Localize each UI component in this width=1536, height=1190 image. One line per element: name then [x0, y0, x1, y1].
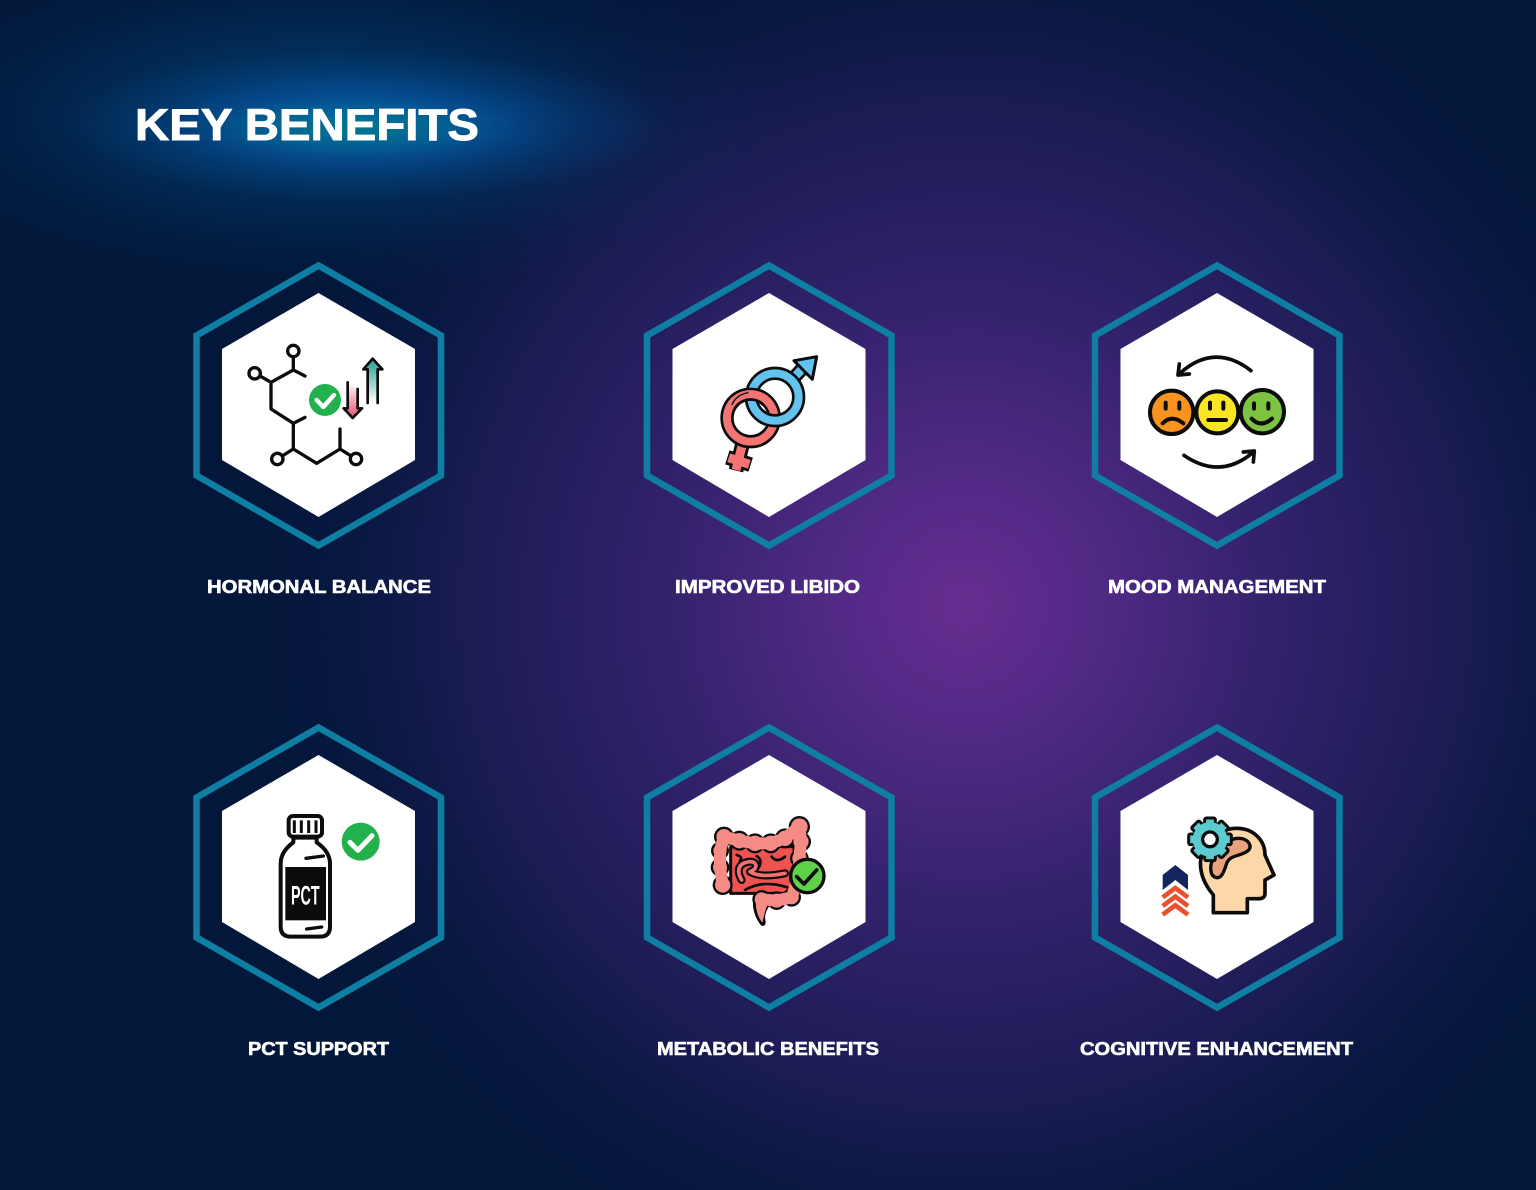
panel: pct support: [196, 728, 441, 1059]
label: PCT SUPPORT: [248, 1039, 389, 1059]
title: KEY BENEFITS: [135, 101, 479, 150]
hexagon frame: mood management: [1095, 266, 1340, 546]
label: COGNITIVE ENHANCEMENT: [1080, 1039, 1353, 1059]
icon: molecule with hormone arrows: [249, 345, 382, 465]
icon: intertwined male and female symbols: [727, 357, 817, 471]
label: METABOLIC BENEFITS: [657, 1039, 879, 1059]
label: IMPROVED LIBIDO: [675, 577, 860, 597]
icon: pct bottle with check: PCT: [291, 880, 320, 910]
panel: metabolic benefits: [647, 728, 892, 1059]
panel: improved libido: [647, 266, 892, 597]
hexagon frame: pct support: [196, 728, 441, 1008]
panel: hormonal balance: [196, 266, 441, 597]
icon: head with gear and rising chevrons: [1163, 818, 1274, 915]
icon: mood faces with cycle arrows: [1150, 357, 1284, 467]
hexagon frame: cognitive enhancement: [1095, 728, 1340, 1008]
label: HORMONAL BALANCE: [207, 577, 431, 597]
icon: intestines with check: [711, 816, 824, 926]
icon: pct bottle with check: [281, 816, 380, 937]
panel: mood management: [1095, 266, 1340, 597]
hexagon frame: hormonal balance: [196, 266, 441, 546]
panel: cognitive enhancement: [1080, 728, 1353, 1059]
label: MOOD MANAGEMENT: [1108, 577, 1326, 597]
hexagon frame: improved libido: [647, 266, 892, 546]
hexagon frame: metabolic benefits: [647, 728, 892, 1008]
